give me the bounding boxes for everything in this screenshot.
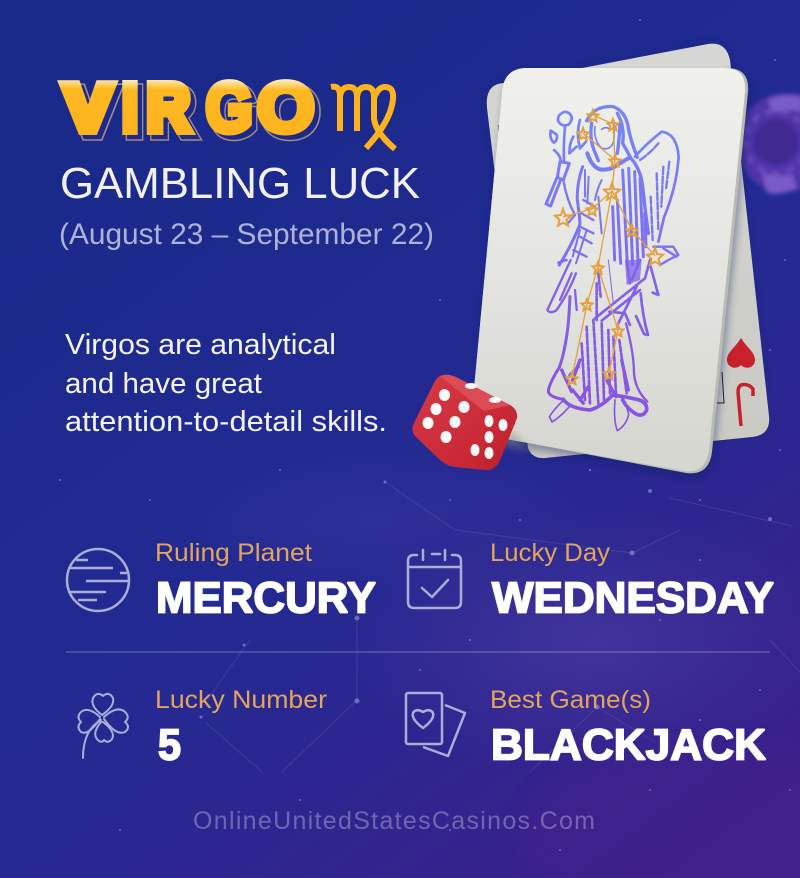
stat: lucky number: 5 <box>158 720 181 770</box>
arm <box>563 180 575 224</box>
stat: lucky day: Lucky Day <box>490 539 611 567</box>
feather fan <box>653 247 678 265</box>
back card heart <box>727 338 755 368</box>
constellation <box>555 110 663 384</box>
title shadow: R <box>151 75 194 150</box>
icon: virgo symbol <box>331 87 395 149</box>
title shadow: G <box>210 73 257 151</box>
dice <box>412 375 540 470</box>
right contour <box>626 323 647 402</box>
stat: best games: Best Game(s) <box>490 686 651 714</box>
arm fan across robe <box>595 260 650 325</box>
virgo figure: upper body <box>546 107 679 265</box>
back card pip fragment <box>498 125 503 165</box>
title shadow: V <box>69 77 116 149</box>
subtitle: GAMBLING LUCK <box>60 159 420 208</box>
hem <box>563 395 647 415</box>
wing tip behind head <box>578 120 586 148</box>
icon: calendar <box>408 550 461 608</box>
title face: G <box>206 68 253 147</box>
title shadow: I <box>126 74 143 152</box>
title shadow: G <box>210 73 257 151</box>
title face: I <box>121 69 139 147</box>
title face: O <box>257 69 314 147</box>
center folds <box>582 273 627 403</box>
wing <box>635 132 679 242</box>
stat: best games: BLACKJACK <box>491 720 766 770</box>
description text: Virgos are analytical <box>65 329 336 361</box>
title face <box>64 68 314 147</box>
robe hatching <box>613 168 646 265</box>
title: Virgo <box>64 68 319 152</box>
stat: ruling planet <box>155 539 376 622</box>
title face: R <box>147 70 190 145</box>
stat: ruling planet: Ruling Planet <box>155 539 312 567</box>
hand and ribbon <box>546 162 569 206</box>
date range: (August 23 – September 22) <box>59 218 434 251</box>
title face: V <box>64 73 111 144</box>
stat: lucky day <box>490 539 774 622</box>
icon: clover <box>78 694 128 758</box>
left sleeve <box>547 260 577 312</box>
face <box>595 124 614 149</box>
description text <box>65 329 387 438</box>
icon: planet <box>67 549 129 611</box>
flower <box>550 112 577 162</box>
virgo figure: lower body <box>547 260 658 431</box>
left robe contour <box>548 297 570 399</box>
hair <box>587 107 637 161</box>
description text: attention-to-detail skills. <box>65 406 387 438</box>
description text: and have great <box>65 368 262 400</box>
title shadow: I <box>126 74 143 152</box>
title shadow: O <box>262 74 319 152</box>
icon: cards <box>406 693 465 756</box>
right sleeve <box>636 267 658 335</box>
title shadow <box>69 73 319 152</box>
front playing card <box>472 68 750 478</box>
divider <box>66 652 770 653</box>
back card letter J <box>738 384 753 426</box>
poker chip <box>736 94 800 194</box>
stat: lucky day: WEDNESDAY <box>492 574 774 622</box>
title shadow: O <box>262 74 319 152</box>
stat: lucky number: Lucky Number <box>155 686 327 714</box>
back playing card <box>487 44 769 458</box>
collar <box>587 153 630 170</box>
feet <box>549 400 629 431</box>
stat: best games <box>490 686 766 770</box>
footer watermark: OnlineUnitedStatesCasinos.Com <box>193 807 595 835</box>
back card frame <box>716 372 724 403</box>
body contours <box>559 167 583 265</box>
stat: lucky number <box>155 686 327 770</box>
title shadow: V <box>69 77 116 149</box>
stat: ruling planet: MERCURY <box>156 574 376 622</box>
title shadow: R <box>151 75 194 150</box>
